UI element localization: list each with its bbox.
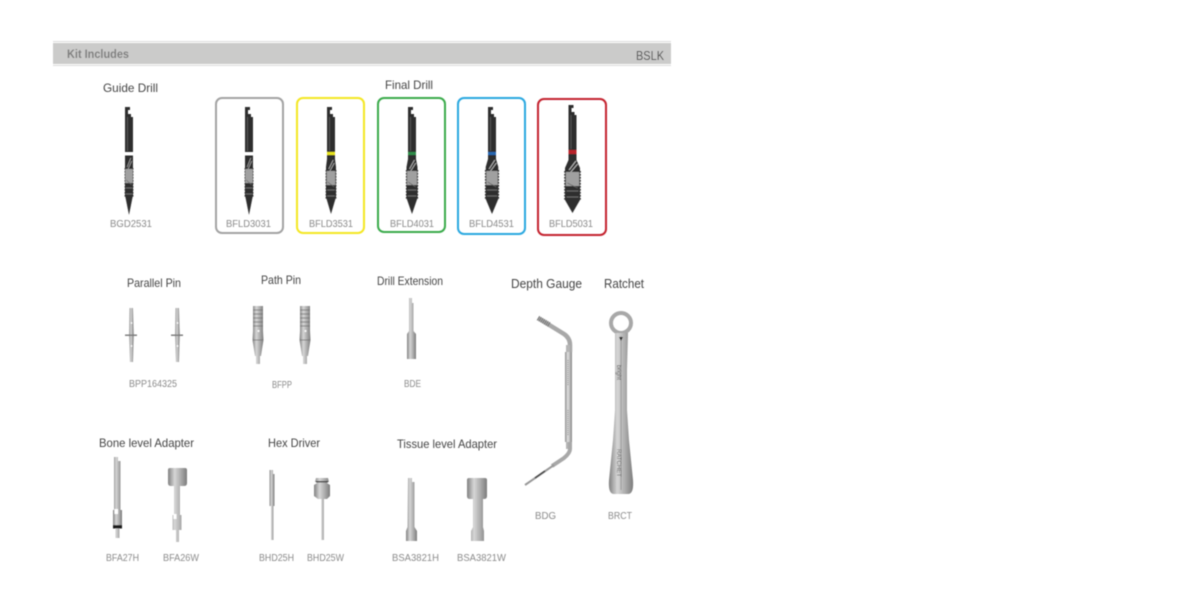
- icon: drill extension: [407, 298, 416, 359]
- icon: path pins: [252, 306, 310, 364]
- heading: Final Drill: Final Drill: [385, 78, 433, 92]
- code: BHD25H: BHD25H: [259, 553, 294, 564]
- icon: ratchet: bright: [615, 365, 621, 380]
- code: BRCT: BRCT: [608, 511, 632, 522]
- icon: ratchet: [609, 313, 633, 494]
- icon: final drill yellow: [326, 107, 336, 214]
- header bar: [53, 41, 671, 66]
- icon: bone level adapter H: [113, 457, 122, 538]
- icon: final drill grey: [245, 107, 253, 215]
- icon: tissue level adapter W: [467, 478, 487, 541]
- icon: final drill green: [406, 107, 418, 214]
- code: BFA26W: BFA26W: [163, 553, 200, 564]
- header title: Kit Includes: [67, 47, 129, 61]
- code: BFLD5031: BFLD5031: [549, 219, 593, 230]
- code: BSA3821W: BSA3821W: [457, 553, 507, 564]
- guide drill BGD2531: [110, 107, 152, 230]
- heading: Guide Drill: Guide Drill: [103, 81, 158, 95]
- heading: Tissue level Adapter: Tissue level Adapter: [397, 437, 497, 451]
- icon: tissue level adapter H: [406, 478, 417, 541]
- panel: BFLD4531: [458, 98, 525, 234]
- code: BFA27H: BFA27H: [106, 553, 139, 564]
- heading: Hex Driver: Hex Driver: [268, 436, 320, 450]
- icon: parallel pins: [125, 308, 183, 362]
- code: BHD25W: BHD25W: [307, 553, 344, 564]
- heading: Depth Gauge: Depth Gauge: [511, 276, 582, 291]
- panel: BFLD3531: [297, 98, 364, 233]
- icon: ratchet: RATCHET: [615, 449, 621, 477]
- icon: depth gauge: [525, 318, 572, 485]
- icon: final drill blue: [486, 107, 498, 214]
- panel: BFLD4031: [378, 98, 445, 232]
- heading: Parallel Pin: Parallel Pin: [127, 276, 181, 290]
- icon: hex driver H: [270, 470, 274, 540]
- code: BSA3821H: BSA3821H: [392, 553, 439, 564]
- code: BFLD3531: BFLD3531: [309, 219, 353, 230]
- heading: Ratchet: Ratchet: [604, 276, 644, 291]
- icon: guide drill: [125, 107, 133, 215]
- icon: final drill red: [565, 105, 580, 213]
- kit code: BSLK: [636, 48, 664, 63]
- heading: Drill Extension: Drill Extension: [377, 274, 443, 288]
- code: BFPP: BFPP: [272, 380, 292, 391]
- icon: hex driver W: [314, 478, 330, 540]
- code: BDE: BDE: [404, 379, 421, 390]
- panel: BFLD3031: [216, 98, 283, 233]
- code: BFLD4531: BFLD4531: [469, 219, 514, 230]
- code: BFLD3031: BFLD3031: [226, 219, 271, 230]
- heading: Bone level Adapter: Bone level Adapter: [99, 436, 194, 450]
- code: BFLD4031: BFLD4031: [390, 219, 434, 230]
- panel: BFLD5031: [538, 99, 606, 235]
- icon: bone level adapter W: [168, 468, 187, 542]
- code: BGD2531: BGD2531: [110, 219, 152, 230]
- heading: Path Pin: Path Pin: [261, 273, 301, 287]
- code: BDG: BDG: [535, 511, 556, 522]
- code: BPP164325: BPP164325: [129, 379, 177, 390]
